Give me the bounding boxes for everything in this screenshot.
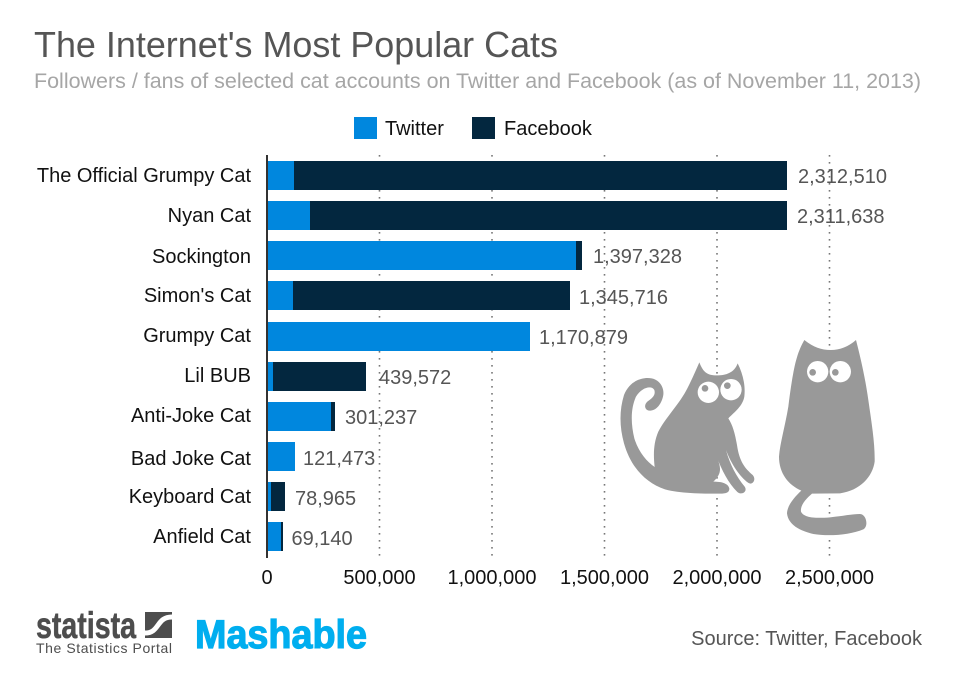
legend: Facebook [504,118,593,140]
source note: Source: Twitter, Facebook [691,628,923,650]
bar: Lil BUB: Lil BUB [184,365,251,387]
bar: Nyan Cat: 2,311,638 [797,206,884,228]
x axis labels: 1,500,000 [560,567,649,589]
bar: Lil BUB [184,362,451,391]
bar: Anfield Cat [153,522,353,551]
bar: Keyboard Cat [129,482,356,511]
bar: Anfield Cat: Anfield Cat [153,526,251,548]
bar: Sockington: Sockington [152,246,251,268]
bar: Grumpy Cat: Grumpy Cat [143,325,251,347]
bar: Simon's Cat: 1,345,716 [579,287,668,309]
icon: sitting cat looking up [620,362,754,494]
bar: Nyan Cat [168,201,884,230]
bar: Anti-Joke Cat: Anti-Joke Cat [131,405,251,427]
bar: Bad Joke Cat: Bad Joke Cat [131,448,251,470]
icon: cat seen from behind [779,340,875,535]
bar: Sockington: 1,397,328 [593,246,682,268]
subtitle: Followers / fans of selected cat accounts on Twitter and Facebook (as of November 11, 2013) [34,70,921,93]
legend [354,117,593,140]
title: The Internet's Most Popular Cats [34,24,558,65]
bar: Sockington [152,241,682,270]
bar: Bad Joke Cat [131,442,375,471]
bar: The Official Grumpy Cat [37,161,887,190]
bar: Bad Joke Cat: 121,473 [303,448,375,470]
y axis line [266,155,268,558]
bar: Anfield Cat: 69,140 [292,528,353,550]
bar: Lil BUB: 439,572 [379,367,451,389]
x axis labels: 500,000 [343,567,416,589]
bar: Keyboard Cat: Keyboard Cat [129,486,251,508]
x axis labels: 2,000,000 [673,567,761,589]
x axis labels [261,567,874,589]
bar: Anti-Joke Cat: 301,237 [345,407,417,429]
x axis labels: 1,000,000 [448,567,536,589]
bar: The Official Grumpy Cat: The Official Grumpy Cat [37,165,251,187]
bar: Nyan Cat: Nyan Cat [168,205,251,227]
bar: Simon's Cat: Simon's Cat [144,285,251,307]
bar: Grumpy Cat: 1,170,879 [539,327,628,349]
bar: Simon's Cat [144,281,668,310]
bar: Keyboard Cat: 78,965 [295,488,356,510]
illustration: cats [620,340,875,535]
bar: Anti-Joke Cat [131,402,417,431]
logo: statista: The Statistics Portal [36,640,172,656]
bar: Grumpy Cat [143,322,628,351]
legend: Twitter [385,118,444,140]
bar: The Official Grumpy Cat: 2,312,510 [798,166,887,188]
x axis labels: 2,500,000 [785,567,874,589]
logo: statista: statista [36,605,136,646]
logo: Mashable: Mashable [195,613,367,657]
x axis labels: 0 [261,567,273,589]
